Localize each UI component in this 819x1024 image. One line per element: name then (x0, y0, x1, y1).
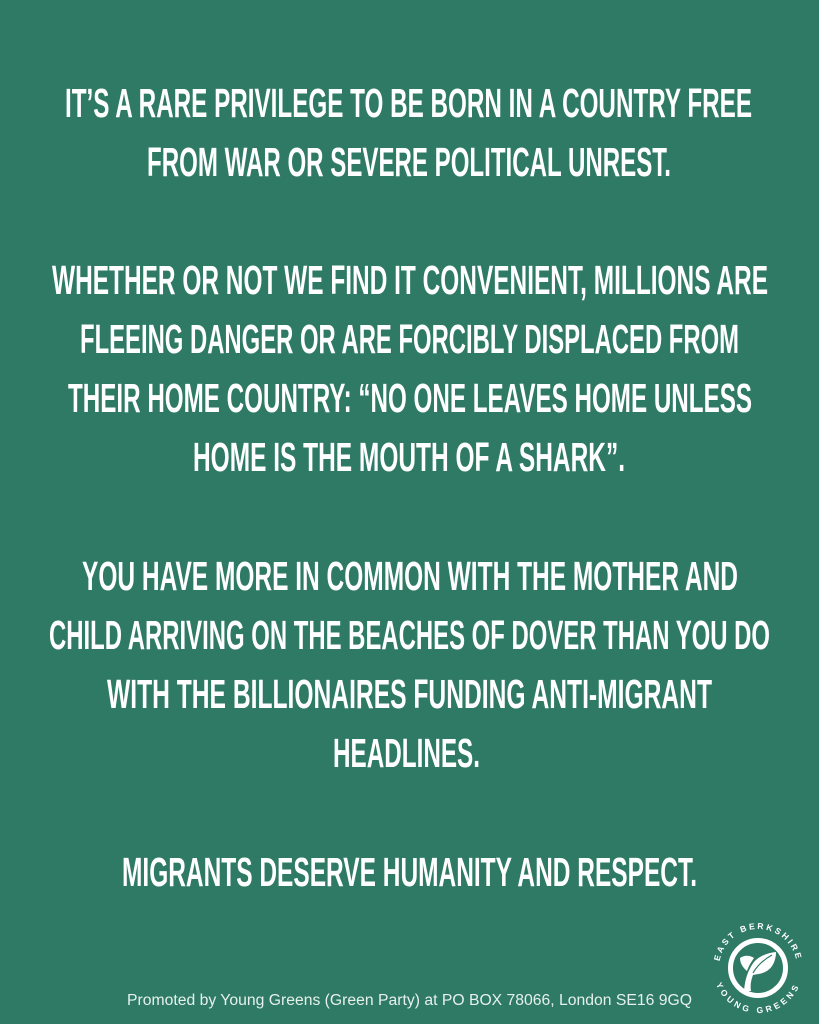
icon: sprout (740, 952, 776, 991)
paragraph 3: HEADLINES. (333, 730, 480, 776)
paragraph 3 (49, 553, 770, 776)
logo ring (730, 940, 786, 996)
logo text bottom: YOUNG GREENS (716, 982, 798, 1014)
paragraph 2 (52, 257, 768, 480)
logo: East Berkshire Young Greens (714, 923, 802, 1014)
logo text top: EAST BERKSHIRE (714, 923, 802, 961)
paragraph 1 (65, 80, 752, 185)
footer imprint: Promoted by Young Greens (Green Party) at PO BOX 78066, London SE16 9GQ (127, 992, 692, 1009)
